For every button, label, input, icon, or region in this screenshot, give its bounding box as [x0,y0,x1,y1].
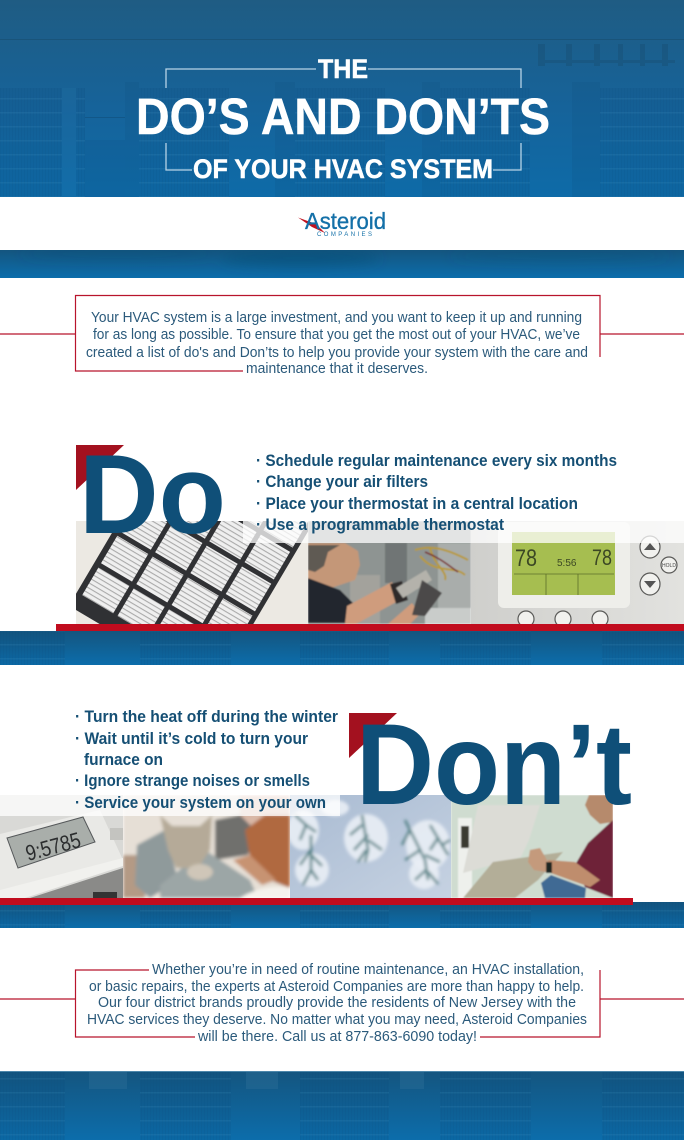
outro text: Our four district brands proudly provide the residents of New Jersey with the [98,995,576,1011]
intro text: maintenance that it deserves. [246,361,428,377]
intro text: Your HVAC system is a large investment, and you want to keep it up and running [91,310,582,326]
panel: textured blue strip [0,249,684,278]
title [136,54,550,184]
photo: thermostat: HOLD [662,563,676,569]
panel: do photo strip [76,521,684,624]
panel: don't photo strip [0,795,613,898]
do list: · Change your air filters [256,473,428,491]
panel: footer banner [0,1071,684,1140]
don't list [75,708,339,812]
don't heading: Don’t [356,701,632,829]
title: THE [318,54,368,84]
title frame [166,69,521,170]
do red bar [56,624,684,631]
panel: blue strip under do [0,631,684,665]
outro text [87,962,587,1045]
intro text: created a list of do's and Don’ts to help you provide your system with the care and [86,345,588,361]
panel: logo strip [0,198,684,249]
don't list: furnace on [84,751,163,769]
do list: · Schedule regular maintenance every six months [256,452,617,470]
title: OF YOUR HVAC SYSTEM [193,154,493,184]
don't list: · Turn the heat off during the winter [75,708,339,726]
do heading: Do [79,432,226,557]
panel: header banner [0,0,684,197]
icon: do red corner [76,445,124,490]
intro text: for as long as possible. To ensure that you get the most out of your HVAC, we’ve [93,327,580,343]
do list: · Place your thermostat in a central location [256,495,578,513]
don't overlay band [0,795,340,816]
photo: digital thermostat [0,795,123,898]
icon: don't red corner [349,713,397,758]
do list [256,452,617,534]
outro text: Whether you’re in need of routine maintenance, an HVAC installation, [152,962,584,978]
do overlay band [243,521,684,543]
panel: blue strip under don't [0,902,684,928]
outro text: will be there. Call us at 877-863-6090 today! [197,1029,477,1045]
outro text: or basic repairs, the experts at Asteroid Companies are more than happy to help. [89,979,584,995]
logo: Asteroid Companies: COMPANIES [317,232,372,238]
don't red bar [0,898,633,905]
don't list: · Ignore strange noises or smells [75,772,310,790]
photo: air filter [76,521,308,624]
outro frame [0,970,684,1037]
logo: Asteroid Companies: Asteroid [305,208,386,234]
do list: · Use a programmable thermostat [256,516,504,534]
photo: frosted pine branches [287,795,451,898]
photo: thermostat: 78 [515,545,537,572]
photo: digital thermostat: 9:5785 [23,827,83,866]
don't list: · Wait until it’s cold to turn your [75,730,309,748]
photo: thermostat: 78 [592,545,612,570]
photo: thermostat: 5:56 [557,558,577,569]
photo: man with air filter [451,795,613,898]
photo: woman holding cat [123,795,290,898]
title: DO’S AND DON’TS [136,88,550,145]
photo: thermostat [471,521,684,627]
outro text: HVAC services they deserve. No matter what you may need, Asteroid Companies [87,1012,587,1028]
photo: technician [308,521,471,624]
don't list: · Service your system on your own [75,794,326,812]
intro frame [0,296,684,371]
intro text [86,310,588,377]
